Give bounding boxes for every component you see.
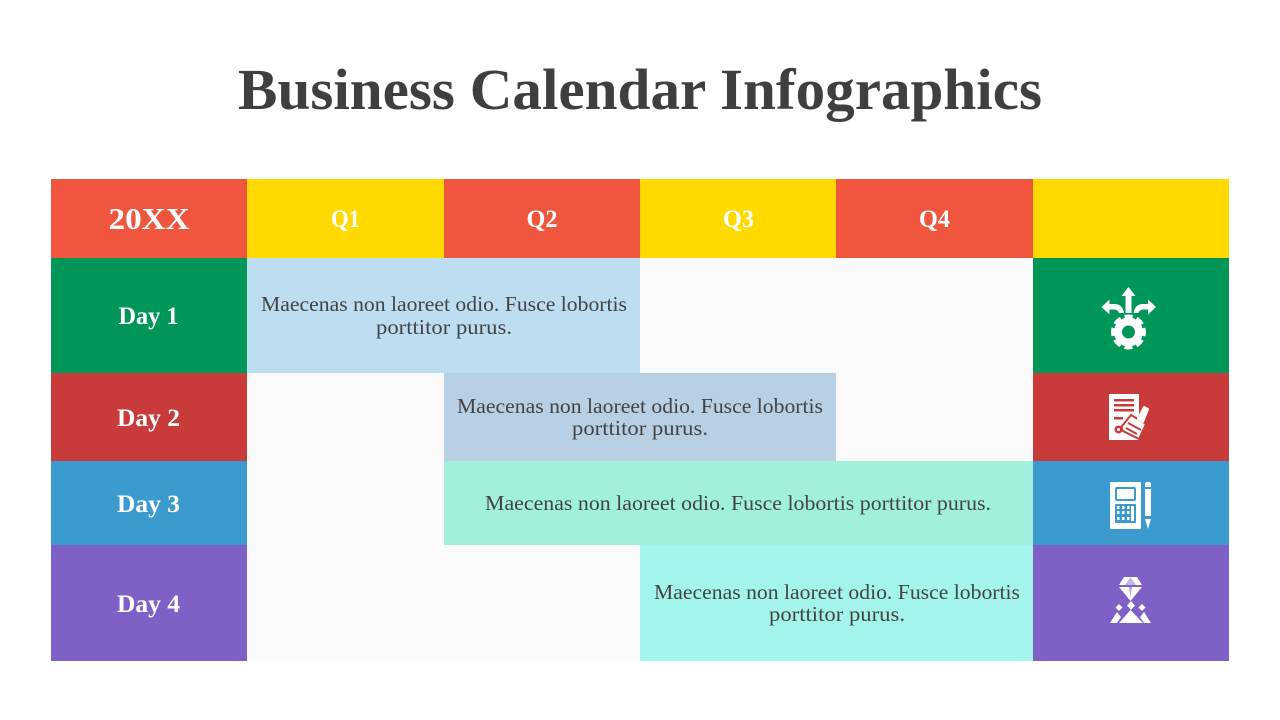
header: Q2	[444, 179, 640, 258]
row label: Day 2: Day 2	[117, 405, 180, 432]
task bar: Day 1	[247, 258, 640, 373]
icon: document with brush	[1109, 394, 1148, 440]
row label: Day 4: Day 4	[117, 591, 181, 618]
task bar: Day 3: Maecenas non laoreet odio. Fusce lobortis porttitor purus.	[485, 491, 991, 515]
row label: Day 2	[51, 373, 247, 461]
row label: Day 1	[51, 258, 247, 373]
header: Q3	[640, 179, 836, 258]
header: Q2: Q2	[526, 206, 558, 233]
task bar: Day 4	[640, 545, 1033, 661]
header: Q1: Q1	[331, 206, 360, 233]
header: year	[51, 179, 247, 258]
task bar: Day 2	[444, 373, 836, 461]
calendar table	[51, 179, 1229, 661]
row label: Day 3	[51, 461, 247, 545]
header: Q1	[247, 179, 444, 258]
icon cell: Day 1	[1033, 258, 1229, 373]
task bar: Day 2: porttitor purus.	[572, 416, 708, 440]
header: Q4	[836, 179, 1033, 258]
icon cell: Day 2	[1033, 373, 1229, 461]
icon cell: Day 4	[1033, 545, 1229, 661]
title: Business Calendar Infographics	[238, 57, 1042, 122]
row label: Day 3: Day 3	[117, 491, 180, 518]
grid background	[247, 258, 1033, 661]
header: Q3: Q3	[723, 206, 754, 233]
header: Q4: Q4	[919, 206, 950, 233]
task bar: Day 3	[444, 461, 1033, 545]
row label: Day 4	[51, 545, 247, 661]
icon cell: Day 3	[1033, 461, 1229, 545]
icon: gear with arrows	[1102, 287, 1156, 348]
icon: calculator and pen	[1110, 482, 1151, 529]
header: year: 20XX	[108, 201, 190, 236]
task bar: Day 4: Maecenas non laoreet odio. Fusce lobortis	[654, 580, 1020, 604]
task bar: Day 1: Maecenas non laoreet odio. Fusce lobortis	[261, 292, 627, 316]
header: blank cell	[1033, 179, 1229, 258]
icon: diamond and mountains	[1110, 577, 1151, 623]
task bar: Day 2: Maecenas non laoreet odio. Fusce lobortis	[457, 394, 823, 418]
row label: Day 1: Day 1	[118, 303, 178, 330]
task bar: Day 4: porttitor purus.	[769, 602, 905, 626]
task bar: Day 1: porttitor purus.	[376, 315, 512, 339]
header row	[51, 179, 1229, 258]
